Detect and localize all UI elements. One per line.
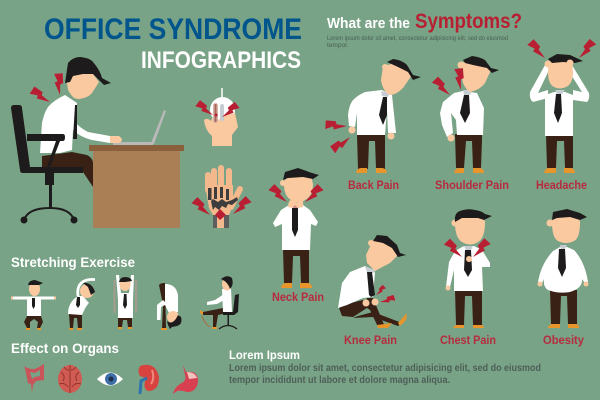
label: shoulder pain: Shoulder Pain	[435, 178, 509, 192]
figure: chest pain	[442, 209, 493, 328]
stretching exercise heading: Stretching Exercise	[11, 254, 135, 270]
label: obesity: Obesity	[543, 333, 584, 347]
lorem ipsum text block: tempor incididunt ut labore et dolore magna aliqua.	[229, 374, 450, 386]
label: knee pain: Knee Pain	[344, 333, 397, 347]
stretching exercise figures	[11, 275, 239, 330]
figure: obesity	[538, 209, 588, 328]
icon: kidney	[138, 365, 159, 394]
figure: neck pain	[267, 168, 325, 288]
figure: back pain	[322, 59, 421, 173]
symptoms heading: What are the	[327, 15, 410, 32]
figure: knee pain	[338, 235, 407, 328]
icon: intestine	[24, 364, 44, 393]
label: chest pain: Chest Pain	[440, 333, 496, 347]
seated office worker at desk	[11, 57, 184, 228]
symptoms heading	[327, 10, 522, 49]
symptoms heading: Lorem ipsum dolor sit amet, consectetur adipisicing elit, sed do eiusmod	[327, 35, 508, 42]
stretch: arms out squat	[11, 280, 56, 330]
stretch: arms overhead	[114, 275, 137, 329]
icon: hand with carpal tunnel	[190, 168, 253, 228]
icon: hand on mouse	[195, 88, 240, 146]
symptoms heading: tempor.	[327, 42, 349, 49]
lorem ipsum text block: Lorem Ipsum	[229, 348, 300, 362]
title: INFOGRAPHICS	[141, 47, 301, 74]
lorem ipsum text block: Lorem ipsum dolor sit amet, consectetur adipisicing elit, sed do eiusmod	[229, 362, 541, 374]
stretch: side bend	[68, 280, 95, 330]
effect on organs heading: Effect on Organs	[11, 340, 119, 356]
label: back pain: Back Pain	[348, 178, 399, 192]
lorem ipsum text block	[229, 348, 541, 386]
symptoms heading: Symptoms?	[415, 10, 522, 33]
figure: headache	[525, 38, 598, 173]
icon: brain	[58, 365, 82, 393]
stretch: seated leg stretch	[200, 276, 239, 329]
icon: eye	[97, 372, 123, 386]
label: headache: Headache	[536, 178, 587, 192]
figure: shoulder pain	[430, 56, 499, 173]
office chair	[11, 105, 83, 224]
icon: stomach	[173, 365, 198, 394]
organ icons	[24, 364, 198, 394]
title	[44, 13, 302, 74]
desk	[89, 145, 184, 228]
label: neck pain: Neck Pain	[272, 290, 324, 304]
stretch: forward bend	[157, 283, 182, 330]
laptop	[113, 110, 166, 145]
title: OFFICE SYNDROME	[44, 13, 302, 46]
